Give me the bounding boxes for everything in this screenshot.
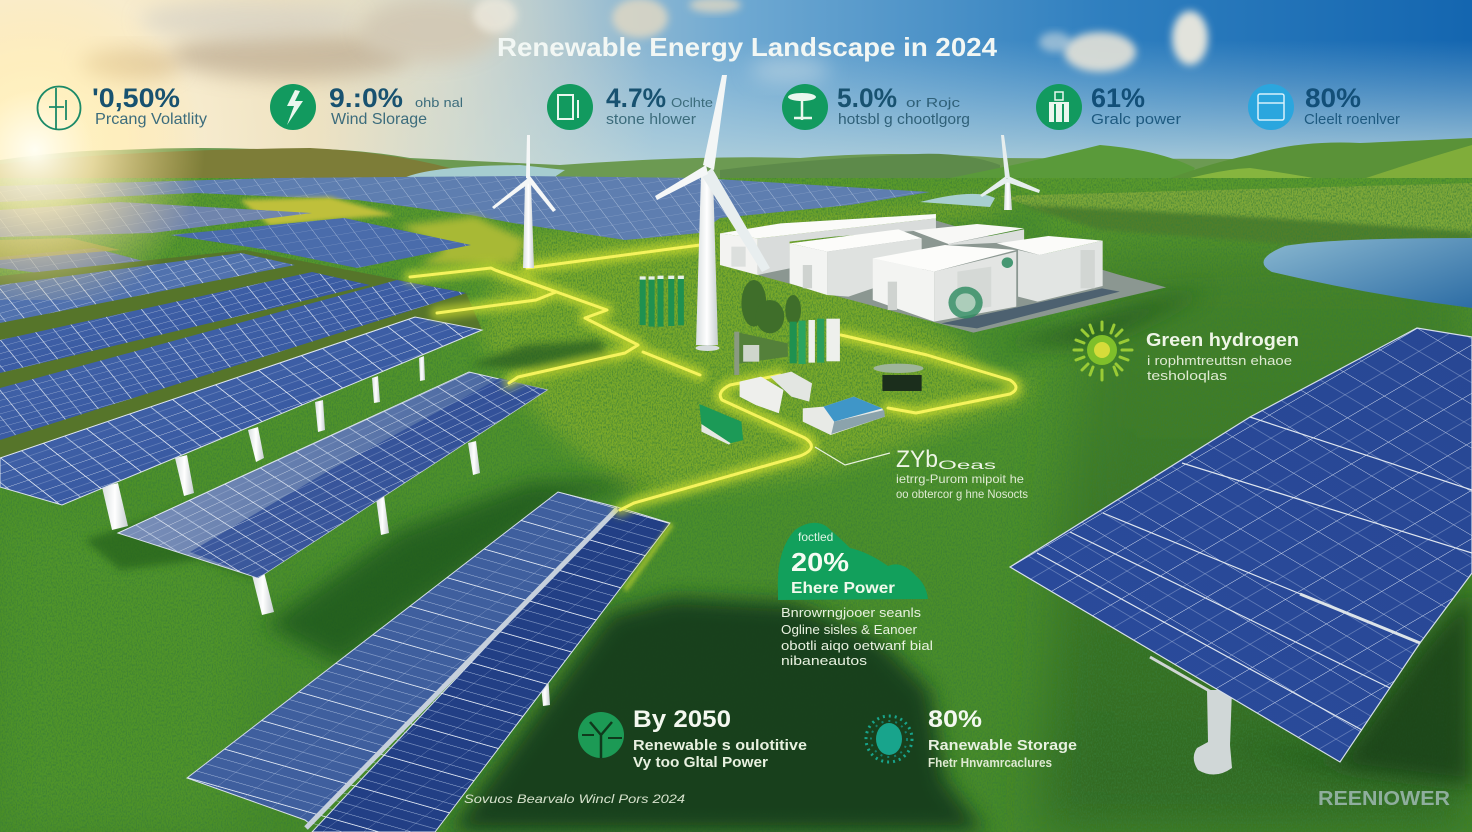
stat: stone blower: Oclhte [671,95,713,110]
main wind turbine [655,75,770,351]
stat: pricing volatility [38,83,207,130]
stat: wind storage: Wind Slorage [331,111,427,128]
callout: green cloud 20 percent: foctled [798,530,833,544]
right wind turbine [980,135,1040,210]
icon: battery stack [1036,84,1082,130]
ground shadows [85,290,1472,832]
dish unit [873,364,923,391]
building back left [720,214,936,275]
title: Renewable Energy Landscape in 2024 [497,32,998,62]
glowing yellow power lines [410,245,1016,510]
callout: storage note: ietrrg-Purom mipoit he [896,472,1024,486]
stat: grid power: Gralc power [1091,111,1181,128]
thin white callout leader [815,447,890,465]
watermark: REENIOWER [1318,788,1451,810]
solar field: distant rows [0,176,930,275]
callout: by 2050: Renewable s oulotitive [633,737,807,754]
icon: frame [1248,84,1294,130]
callout: green cloud 20 percent: obotli aiqo oetwanf bial [781,638,933,653]
stat: clean receiver: 80% [1305,83,1361,113]
support legs [102,356,550,706]
callout: green cloud 20 percent: Bnrowrngjooer seanls [781,605,922,620]
callout: by 2050: Vy too Gltal Power [633,754,768,771]
solar panel: front left one [0,317,482,505]
stat: wind storage: ohb nal [415,95,463,110]
callout: by 2050 [578,706,807,771]
callout: storage note: Oeas [938,458,996,472]
fence unit [734,332,788,375]
white battery cabinets [740,372,812,413]
icon: device [547,84,593,130]
stat: hybrid charging: hotsbl g chootlgorg [838,111,970,128]
callout: green cloud 20 percent: Ogline sisles & Eanoer [781,622,918,637]
callout: green cloud 20 percent: 20% [791,547,849,577]
stat: clean receiver: Cleelt roenlver [1304,111,1400,128]
stat: clean receiver [1248,83,1400,130]
building back right [997,236,1103,302]
callout: green cloud 20 percent: nibaneautos [781,653,868,668]
callout: green cloud 20 percent: Ehere Power [791,580,895,597]
callout: storage note: oo obtercor g hne Nosocts [896,487,1028,501]
stat: pricing volatility: '0,50% [92,83,180,113]
callout: 80 percent storage: 80% [928,706,982,733]
solar panel: front left two [118,372,547,578]
equipment: electrolyser stacks and batteries [640,276,923,445]
stat: hybrid charging: or Rojc [906,95,961,110]
stat: pricing volatility: Prcang Volatlity [95,111,207,128]
icon: lightning [270,84,316,130]
solar panel: foreground right with pole [1010,328,1472,775]
solar rows: middle left [0,250,482,480]
building front [873,245,1016,322]
green cabinet [699,404,743,445]
callout: 80 percent storage [866,706,1077,770]
tree [741,280,801,333]
green and white cylinders [790,319,840,364]
callout: green hydrogen: tesholoqlas [1147,368,1228,383]
callout: 80 percent storage: Fhetr Hnvamrcaclures [928,755,1052,770]
blue roof unit [803,397,885,435]
meadow ground [0,178,1472,832]
distant hills [0,138,1472,240]
stat: hybrid charging [782,83,970,130]
solar panel: foreground centre [187,492,672,832]
callout: green hydrogen [1074,322,1299,383]
battery storage buildings [720,214,1166,333]
stat: stone blower: stone hlower [606,111,696,128]
callout: storage note: ZYb [896,446,938,473]
icon: electrolyser [782,84,828,130]
stat: stone blower [547,83,713,130]
icon: tree [578,712,624,758]
sky background [0,0,1472,260]
callout: green hydrogen: i rophmtreuttsn ehaoe [1147,353,1292,368]
stat: wind storage [270,83,463,130]
callout: 80 percent storage: Ranewable Storage [928,737,1077,754]
stat: stone blower: 4.7% [606,83,666,113]
callout: green cloud 20 percent [778,523,933,668]
icon: green sun [1074,322,1132,380]
icon: teal dotted egg [866,716,912,762]
callout: storage note [896,446,1028,501]
sun glare [0,0,300,300]
green cylinders left [640,276,684,327]
stat: wind storage: 9.:0% [329,83,403,113]
building back middle [790,229,922,297]
icon: turbine ring [38,86,80,130]
stat: hybrid charging: 5.0% [837,83,897,113]
callout: by 2050: By 2050 [633,706,731,733]
building back small right [913,224,1024,245]
river [1264,238,1472,308]
source note: Sovuos Bearvalo Wincl Pors 2024 [464,792,685,806]
stat: grid power [1036,83,1181,130]
stat: grid power: 61% [1091,83,1145,113]
callout: green hydrogen: Green hydrogen [1146,330,1299,350]
yellow glow along panel edge [625,524,672,590]
left wind turbine [492,135,556,268]
